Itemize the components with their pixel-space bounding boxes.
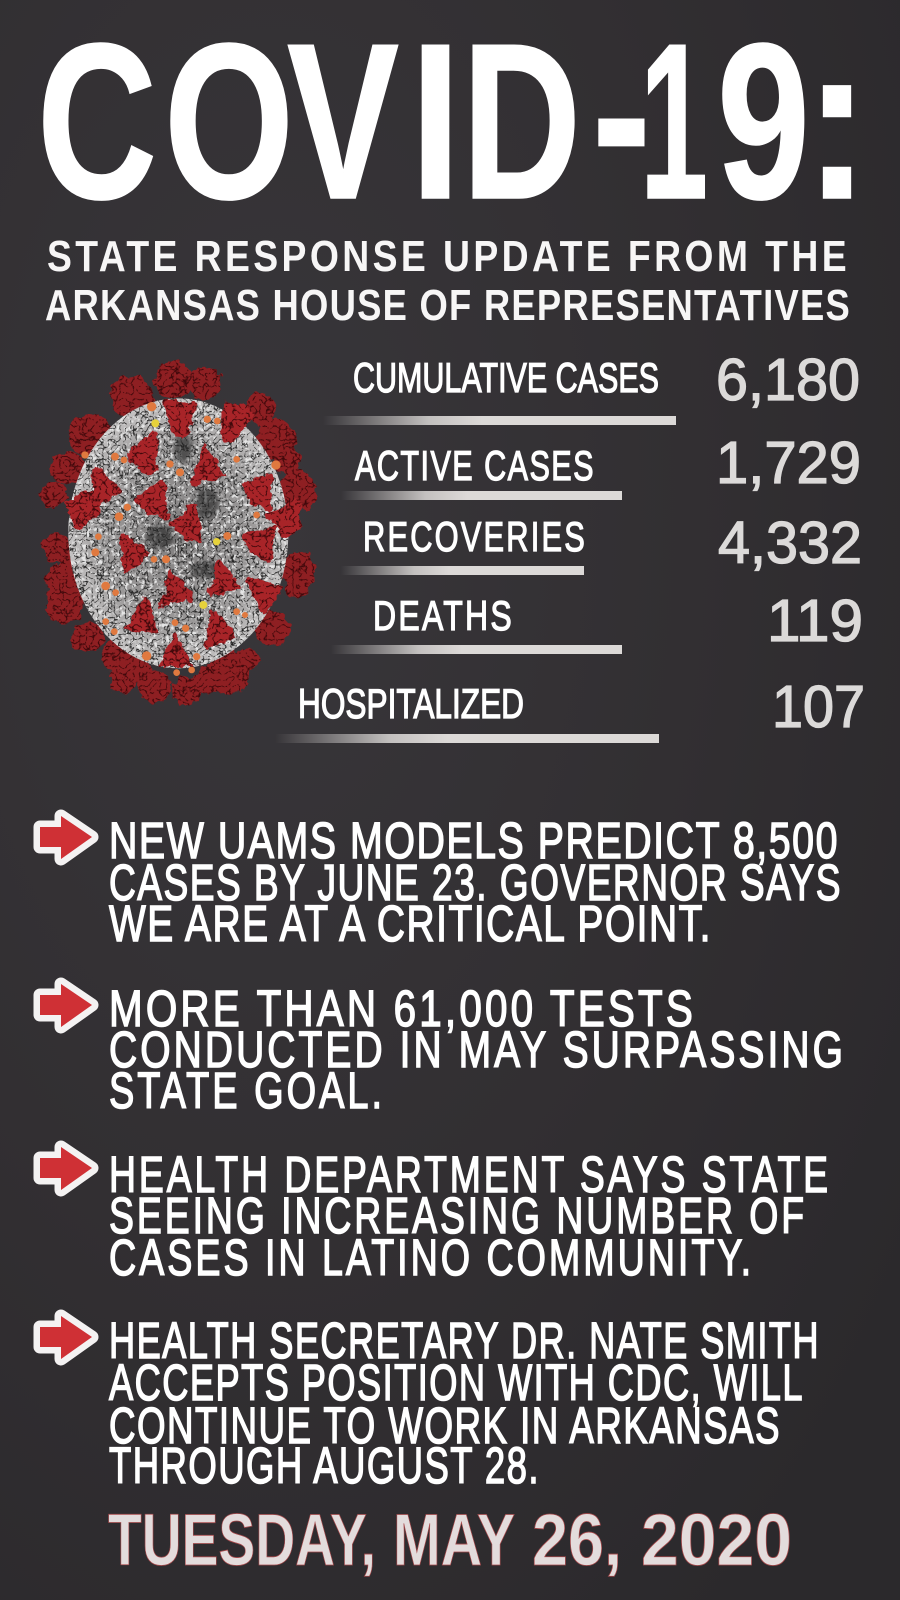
date (108, 1500, 792, 1581)
stat row: deaths: 119 (767, 588, 863, 654)
icon: coronavirus illustration (40, 361, 316, 705)
title: D (462, 0, 581, 246)
date: TUESDAY, (108, 1500, 376, 1581)
stat row: cumulative cases: 6,180 (716, 347, 860, 413)
stat row: cumulative cases: CUMULATIVE CASES (353, 354, 659, 401)
stat row: cumulative cases (323, 347, 860, 425)
bullet text: THROUGH AUGUST 28. (109, 1437, 540, 1494)
bullet 3 (40, 1146, 831, 1286)
title: O (164, 0, 294, 246)
bullet text: MORE THAN 61,000 TESTS (109, 980, 696, 1037)
title: 9 (717, 0, 810, 246)
stat row: hospitalized: 107 (772, 674, 865, 740)
icon: arrow (40, 1316, 92, 1359)
surface spikes (67, 403, 300, 665)
icon: arrow (40, 1147, 92, 1190)
orange and yellow studs (81, 402, 281, 676)
bullet text: WE ARE AT A CRITICAL POINT. (109, 895, 712, 952)
bullet 2 (40, 980, 846, 1119)
bullet text (109, 980, 846, 1119)
title: I (410, 0, 461, 246)
rim spikes (40, 361, 316, 705)
sphere body (68, 398, 288, 668)
title: C (37, 0, 157, 246)
bullet text (109, 1312, 820, 1494)
stat row: deaths: DEATHS (373, 592, 514, 639)
subtitle (45, 232, 851, 330)
bullet 1 (40, 812, 842, 952)
icon: arrow (40, 984, 92, 1027)
stat row: recoveries: 4,332 (718, 510, 862, 576)
date: MAY (393, 1500, 514, 1581)
stat row: recoveries: RECOVERIES (363, 513, 587, 560)
stat row: active cases (341, 430, 861, 500)
date: 2020 (641, 1500, 792, 1581)
stat row: hospitalized (275, 674, 865, 743)
date: 26, (532, 1500, 622, 1581)
title: 1 (640, 0, 708, 246)
dark surface shadows (146, 431, 223, 579)
stat row: hospitalized: HOSPITALIZED (298, 680, 524, 727)
stat row: recoveries (341, 510, 862, 576)
stat row: active cases: 1,729 (716, 430, 861, 496)
title (37, 0, 869, 246)
bullet text (109, 1146, 831, 1286)
title: V (287, 0, 399, 246)
bullet text (109, 812, 842, 952)
title: : (805, 0, 869, 246)
bullet 4 (40, 1312, 820, 1494)
stat row: deaths (331, 588, 863, 654)
stat row: active cases: ACTIVE CASES (355, 442, 595, 489)
bullet text: STATE GOAL. (109, 1062, 385, 1119)
icon: arrow (40, 816, 92, 859)
